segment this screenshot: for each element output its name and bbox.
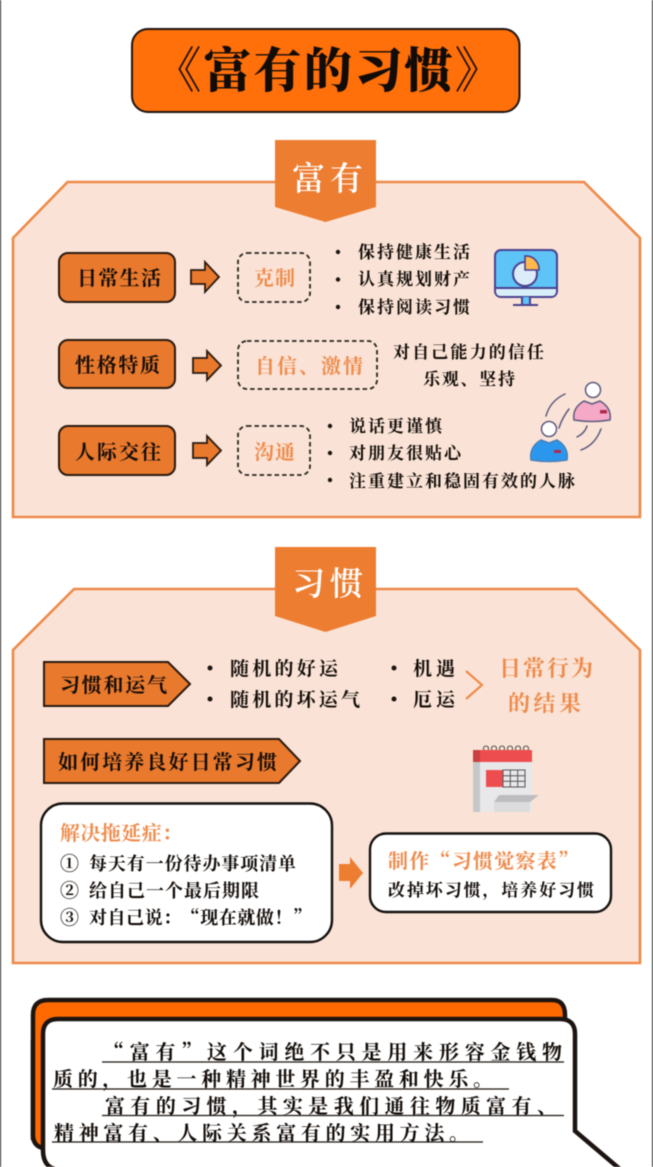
row: 人际交往 [59,416,575,491]
chevron [466,671,482,699]
row: 人际交往: 说话更谨慎 [349,416,444,436]
row: 日常生活: 克制 [254,266,295,290]
result text: 日常行为 [499,656,593,681]
heading tab: 习惯 [275,547,376,632]
paragraph text: 质的，也是一种精神世界的丰盈和快乐。 [53,1068,493,1091]
row: 人际交往: 注重建立和稳固有效的人脉 [349,471,575,491]
row: 日常生活: 保持阅读习惯 [358,297,470,317]
card: 解决拖延症: 给自己一个最后期限 [89,880,259,901]
card: 解决拖延症: ① [60,849,79,876]
arrow [339,857,363,889]
card: 解决拖延症 [41,804,332,942]
icon: two people talking [531,382,610,462]
card: 解决拖延症: ③ [60,903,79,930]
tag: 如何培养良好日常习惯: 如何培养良好日常习惯 [58,751,277,774]
icon: calendar [473,746,539,812]
paragraph text: 富有的习惯，其实是我们通往物质富有、 [105,1094,557,1118]
title banner [132,29,520,112]
row: 人际交往: 人际交往 [75,441,161,464]
card: 解决拖延症: 对自己说：“现在就做！” [89,904,311,930]
paragraph text [52,1036,564,1145]
result text [499,656,593,716]
heading tab: 富有: 富有 [292,161,363,198]
paragraph text: 精神富有、人际关系富有的实用方法。 [54,1121,469,1145]
row: 性格特质: 对自己能力的信任 [393,342,544,362]
card: 解决拖延症: 每天有一份待办事项清单 [89,853,296,874]
heading tab: 富有 [275,140,376,222]
card: 习惯觉察表: 改掉坏习惯，培养好习惯 [388,880,594,901]
list: luck [208,658,456,711]
row: 日常生活: 认真规划财产 [358,269,470,289]
tag: 如何培养良好日常习惯 [44,739,300,783]
list: luck: 随机的好运 [230,658,339,680]
paragraph text: “富有”这个词绝不只是用来形容金钱物 [104,1036,562,1065]
icon: monitor with pie chart [495,250,557,305]
title banner: 《富有的习惯》 [153,44,503,98]
result text: 的结果 [508,691,581,716]
panel: 习惯 [13,547,640,963]
row: 性格特质 [59,340,544,389]
row: 性格特质: 自信、激情 [255,355,363,378]
card: 解决拖延症: 解决拖延症： [60,822,182,845]
list: luck: 机遇 [413,658,455,680]
row: 性格特质: 乐观、坚持 [423,369,515,389]
row: 人际交往: 对朋友很贴心 [349,443,463,463]
tag: 习惯和运气: 习惯和运气 [60,674,167,697]
row: 性格特质: 性格特质 [75,354,160,377]
row: 日常生活: 日常生活 [77,267,161,290]
panel: 富有 [13,140,640,517]
card: 习惯觉察表: 制作“习惯觉察表” [388,845,578,874]
card: 习惯觉察表 [370,834,611,912]
card: 解决拖延症: ② [60,876,79,903]
callout: summary [33,1000,621,1167]
heading tab: 习惯: 习惯 [292,566,363,603]
row: 人际交往: 沟通 [254,441,295,464]
list: luck: 厄运 [413,689,456,711]
row: 日常生活: 保持健康生活 [358,242,470,262]
row: 日常生活 [59,242,470,317]
tag: 习惯和运气 [44,662,190,706]
list: luck: 随机的坏运气 [230,689,360,711]
